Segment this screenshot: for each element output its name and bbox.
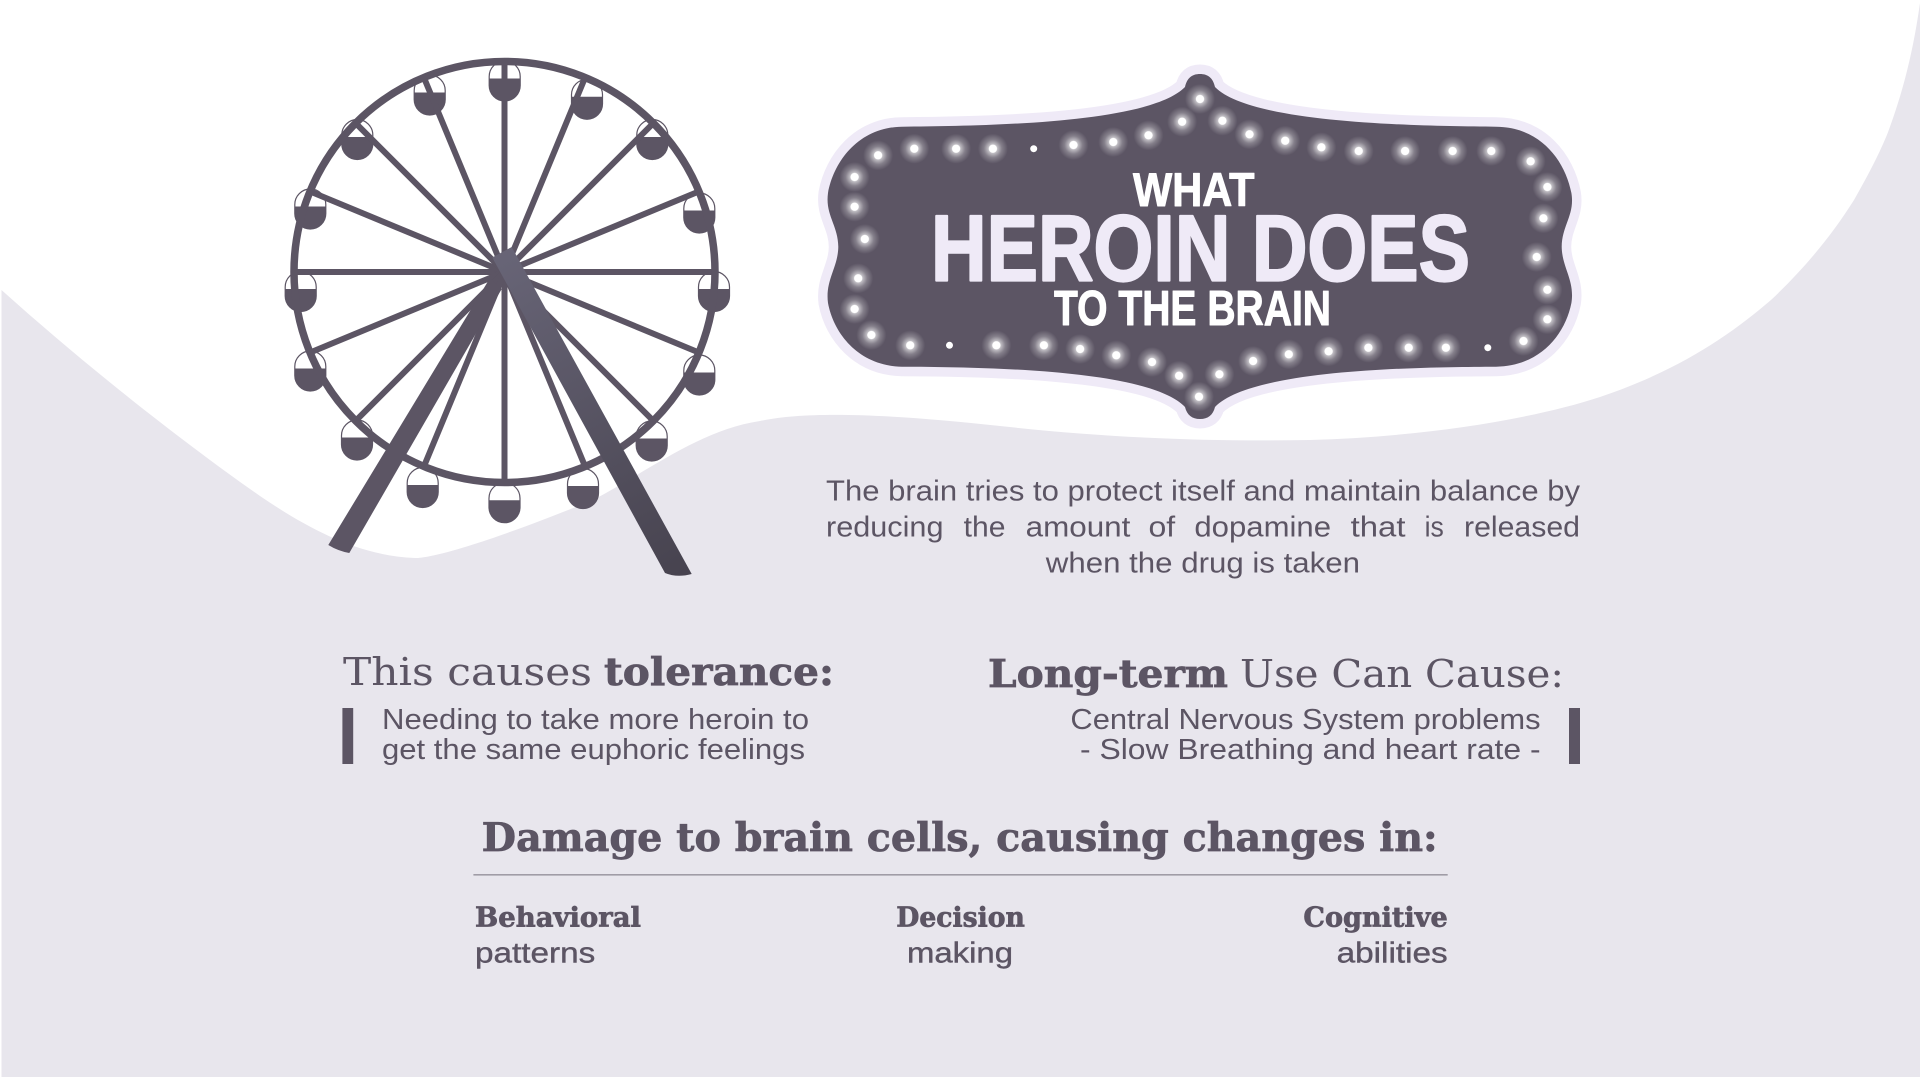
column: behavioral patterns bbox=[475, 903, 641, 970]
tolerance description bbox=[382, 704, 809, 766]
long-term description: - Slow Breathing and heart rate - bbox=[1080, 734, 1541, 766]
intro paragraph: The brain tries to protect itself and maintain balance by bbox=[826, 476, 1581, 508]
left leg bbox=[328, 278, 502, 553]
small lights bbox=[946, 145, 1491, 351]
heading: tolerance: tolerance: bbox=[604, 649, 834, 694]
intro paragraph: dopamine bbox=[1194, 512, 1331, 544]
intro paragraph: the bbox=[964, 512, 1006, 544]
right leg bbox=[492, 247, 692, 576]
heading: damage: Damage to brain cells, causing changes in: bbox=[482, 815, 1438, 861]
column: behavioral patterns: Behavioral bbox=[475, 903, 641, 934]
rim bbox=[294, 62, 715, 482]
column: cognitive abilities bbox=[1303, 903, 1448, 970]
title: heroin does: HEROIN DOES bbox=[931, 196, 1470, 300]
icon: ferris wheel bbox=[285, 61, 730, 576]
spokes bbox=[294, 62, 714, 482]
gondolas bbox=[285, 61, 730, 523]
heading: long-term use: Use Can Cause: bbox=[1240, 652, 1564, 696]
intro paragraph: released bbox=[1464, 512, 1580, 544]
heading: tolerance: This causes bbox=[343, 650, 592, 694]
column: decision making bbox=[896, 903, 1025, 970]
intro paragraph: amount bbox=[1026, 512, 1130, 544]
title: to the brain: TO THE BRAIN bbox=[1054, 282, 1331, 336]
long-term description bbox=[1070, 704, 1541, 766]
heading: tolerance bbox=[343, 649, 834, 694]
intro paragraph: that bbox=[1351, 512, 1406, 544]
sign plate bbox=[828, 74, 1572, 419]
intro paragraph: reducing bbox=[826, 512, 944, 544]
accent bar right bbox=[1569, 708, 1580, 764]
intro paragraph: when the drug is taken bbox=[1045, 548, 1360, 580]
title sign bbox=[828, 74, 1572, 419]
column: decision making: making bbox=[907, 938, 1013, 970]
column: behavioral patterns: patterns bbox=[475, 938, 595, 970]
long-term description: Central Nervous System problems bbox=[1070, 704, 1541, 736]
intro paragraph bbox=[826, 476, 1581, 580]
column: cognitive abilities: abilities bbox=[1337, 938, 1448, 970]
intro paragraph: is bbox=[1425, 512, 1444, 544]
tolerance description: Needing to take more heroin to bbox=[382, 704, 809, 736]
column: cognitive abilities: Cognitive bbox=[1303, 903, 1448, 934]
accent bar left bbox=[342, 708, 353, 764]
column: decision making: Decision bbox=[896, 903, 1025, 934]
title: what: WHAT bbox=[1133, 163, 1255, 216]
heading: long-term use bbox=[988, 651, 1564, 696]
marquee lights bbox=[840, 84, 1562, 412]
tolerance description: get the same euphoric feelings bbox=[382, 734, 805, 766]
panel: tolerance bbox=[342, 649, 834, 766]
intro paragraph: of bbox=[1148, 512, 1176, 544]
panel: brain cell damage bbox=[473, 815, 1448, 970]
heading: long-term use: Long-term bbox=[988, 651, 1228, 696]
panel: long-term use bbox=[988, 651, 1580, 766]
